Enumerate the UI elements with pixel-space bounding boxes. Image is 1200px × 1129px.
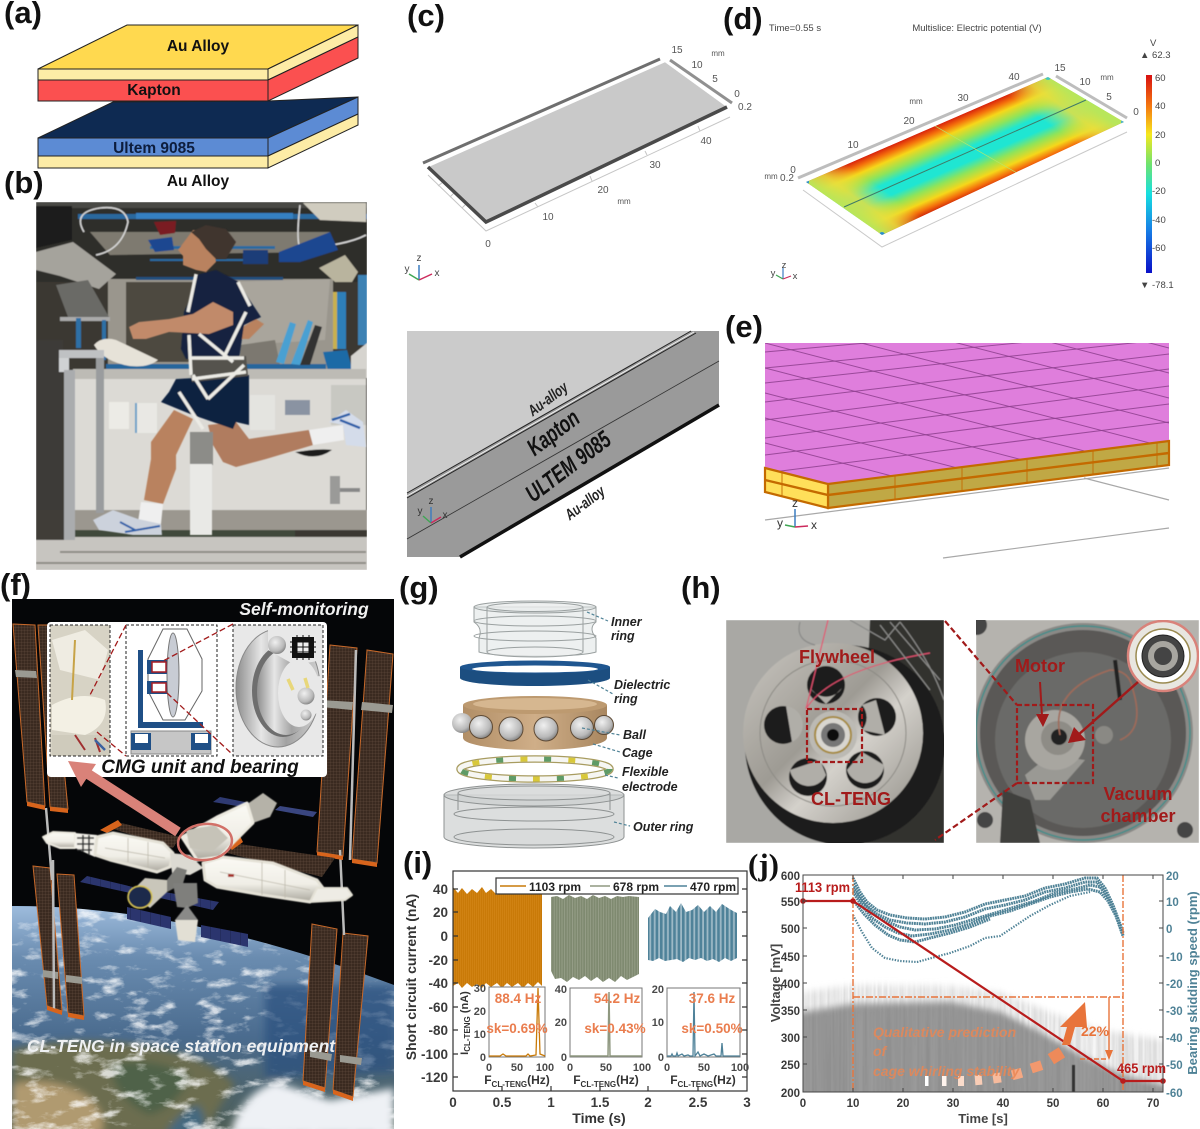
color bar labels: -60 <box>1152 243 1166 254</box>
bottom tick labels <box>800 1098 1159 1110</box>
potential field sheet <box>803 74 1127 238</box>
left tick labels: 550 <box>781 897 800 909</box>
inset y axis title: (nA) <box>459 991 471 1016</box>
label: Ultem 9085: Ultem 9085 <box>113 140 195 157</box>
light top face <box>407 331 691 493</box>
inset FFT 1103 rpm: CL-TENG <box>492 1080 527 1089</box>
inset FFT 678 rpm: sk=0.43% <box>584 1021 646 1036</box>
layer labels: Au-alloy <box>524 378 572 420</box>
panel label (e): (e) <box>725 309 763 344</box>
left tick labels: 600 <box>781 871 800 883</box>
motor arrow <box>1036 682 1049 727</box>
right tick labels: -60 <box>1166 1088 1183 1100</box>
time label: Time=0.55 s <box>769 23 821 34</box>
axis numbers: 15 <box>1054 63 1066 74</box>
color bar <box>1146 75 1152 273</box>
dielectric ring <box>460 660 610 686</box>
axis numbers: 0 <box>1133 107 1139 118</box>
plot title: Multislice: Electric potential (V) <box>912 23 1042 34</box>
flexible electrode <box>460 759 610 779</box>
inset FFT 678 rpm: 100 <box>633 1062 651 1074</box>
axis numbers: 30 <box>649 160 661 171</box>
panel: electric potential simulation <box>764 23 1174 291</box>
axis numbers: mm <box>711 49 725 58</box>
axis numbers: 10 <box>1079 77 1091 88</box>
axis numbers: 10 <box>542 212 554 223</box>
axis box <box>428 117 730 231</box>
left tick labels: 450 <box>781 952 800 964</box>
triad <box>771 260 798 282</box>
panel: COMSOL geometry view <box>404 45 752 280</box>
inset FFT 1103 rpm: 20 <box>474 1006 486 1018</box>
y tick labels: 40 <box>433 882 448 897</box>
panel: bearing exploded view <box>444 601 694 848</box>
inset FFT 1103 rpm: F <box>484 1073 492 1087</box>
inset FFT 678 rpm: 20 <box>555 1017 567 1029</box>
growing dashed trend arrow <box>925 1002 1087 1086</box>
inset FFT 1103 rpm: 0 <box>486 1062 492 1074</box>
bottom tick labels: 20 <box>897 1098 909 1110</box>
inset FFT 470 rpm: 0 <box>658 1052 664 1064</box>
solar array bands and masts <box>15 650 393 1101</box>
bottom tick labels: 0 <box>800 1098 806 1110</box>
color bar labels: 40 <box>1155 101 1166 112</box>
color bar labels: 20 <box>1155 130 1166 141</box>
red speed line <box>800 898 1166 1084</box>
bottom tick labels: 10 <box>847 1098 859 1110</box>
inset FFT 678 rpm: 40 <box>555 984 567 996</box>
part labels: electrode <box>622 780 678 794</box>
part labels: Outer ring <box>633 820 694 834</box>
panel label (b): (b) <box>4 165 44 200</box>
start speed label: 1113 rpm <box>795 879 850 895</box>
inset FFT 1103 rpm: (Hz) <box>527 1073 550 1087</box>
panel: astronaut treadmill photo <box>36 202 367 570</box>
bottom tick labels: 70 <box>1147 1098 1159 1110</box>
triad: z <box>428 496 434 507</box>
gray sheet <box>428 62 727 222</box>
inset FFT 470 rpm: (Hz) <box>713 1073 736 1087</box>
x tick labels: 1.5 <box>591 1095 610 1110</box>
left tick labels: 250 <box>781 1060 800 1072</box>
color bar labels <box>1140 38 1174 291</box>
panel label (d): (d) <box>723 1 763 36</box>
current bands <box>453 887 737 988</box>
Flywheel label: Flywheel <box>799 647 875 667</box>
part labels: ring <box>611 629 635 643</box>
earth <box>12 900 394 1129</box>
y tick labels <box>421 882 448 1085</box>
triad: x <box>793 271 798 282</box>
left tick labels <box>781 871 800 1100</box>
annotation text <box>873 1024 1020 1079</box>
arrow to inset <box>68 761 178 832</box>
triad <box>777 496 817 532</box>
axis numbers <box>485 45 752 250</box>
inset FFT 470 rpm: 100 <box>731 1062 749 1074</box>
inset FFT 470 rpm: F <box>670 1073 678 1087</box>
right tick labels: 10 <box>1166 897 1179 909</box>
x tick labels: 0.5 <box>493 1095 512 1110</box>
CMG diagram <box>131 629 211 754</box>
axis numbers: 15 <box>671 45 683 56</box>
CMG photo <box>50 625 110 756</box>
triad: x <box>434 268 440 279</box>
panel label (i): (i) <box>403 845 432 880</box>
part labels: Cage <box>622 746 653 760</box>
axis numbers: 0.2 <box>738 102 752 113</box>
right tick labels: -20 <box>1166 979 1183 991</box>
y tick labels: -40 <box>428 976 448 991</box>
y tick labels: -80 <box>428 1023 448 1038</box>
inset FFT 470 rpm: 10 <box>652 1017 664 1029</box>
x tick labels: 2 <box>644 1095 652 1110</box>
left tick labels: 200 <box>781 1088 800 1100</box>
inset FFT 470 rpm: 20 <box>652 984 664 996</box>
color bar labels: -20 <box>1152 186 1166 197</box>
legend: 1103 rpm <box>529 880 581 894</box>
y tick labels: -20 <box>428 953 448 968</box>
axis numbers: mm <box>1100 73 1114 82</box>
inner ring <box>474 601 596 657</box>
color bar labels: 60 <box>1155 73 1166 84</box>
y tick labels: -60 <box>428 1000 448 1015</box>
axis numbers: mm <box>617 197 631 206</box>
bottom tick labels: 50 <box>1047 1098 1059 1110</box>
mesh lines <box>765 343 1169 476</box>
station modules <box>43 793 352 942</box>
red circle highlight <box>176 821 234 863</box>
triad <box>404 253 440 280</box>
panel: vacuum chamber photo <box>967 615 1199 843</box>
x axis title: Time (s) <box>572 1110 626 1126</box>
triad: y <box>771 268 776 279</box>
left tick labels: 500 <box>781 924 800 936</box>
lower plate: Ultem 9085 and Au alloy <box>38 97 358 168</box>
22 percent drop arrow: 22% <box>1081 1023 1110 1039</box>
gold front face <box>765 441 1169 508</box>
x tick labels: 2.5 <box>689 1095 708 1110</box>
part labels: Flexible <box>622 765 669 779</box>
inset FFT 678 rpm: 54.2 Hz <box>594 991 641 1006</box>
bearing cut-away <box>233 625 323 756</box>
x tick labels: 1 <box>547 1095 555 1110</box>
skidding speed scatter <box>853 878 1123 962</box>
inset FFT 678 rpm: F <box>573 1073 581 1087</box>
legend: 470 rpm <box>690 880 736 894</box>
triad: x <box>811 518 817 532</box>
y axis title: Short circuit current (nA) <box>403 894 419 1060</box>
color bar labels: ▼ -78.1 <box>1140 280 1174 291</box>
axis numbers: 0 <box>790 165 796 176</box>
station caption: CL-TENG in space station equipment <box>27 1036 336 1056</box>
bearing inset circle <box>1128 621 1198 691</box>
axis numbers: mm <box>764 172 778 181</box>
color bar labels: 0 <box>1155 158 1160 169</box>
axis numbers <box>764 63 1139 184</box>
y tick labels: -120 <box>421 1070 448 1085</box>
dashed box on chamber <box>1017 705 1093 783</box>
part labels: Inner <box>611 615 643 629</box>
panel: zoomed layer cross-section <box>407 331 719 557</box>
chart: short circuit current <box>403 871 751 1126</box>
panel: meshed geometry <box>764 343 1170 559</box>
color bar labels: V <box>1150 38 1157 49</box>
Au-alloy lower label: Au-alloy <box>561 482 609 524</box>
axis numbers: 40 <box>1008 72 1020 83</box>
dashed box on flywheel <box>807 709 862 762</box>
x tick labels: 0 <box>449 1095 457 1110</box>
axis numbers: 0.2 <box>780 173 794 184</box>
inset FFT 678 rpm: 50 <box>600 1062 612 1074</box>
bottom tick labels: 60 <box>1097 1098 1109 1110</box>
right tick labels: -40 <box>1166 1033 1183 1045</box>
inset FFT 1103 rpm: 30 <box>474 983 486 995</box>
right axis title: Bearing skidding speed (rpm) <box>1185 891 1200 1075</box>
y tick labels: 20 <box>433 905 448 920</box>
orange guide lines <box>853 875 1123 1092</box>
axis lines <box>765 468 1169 558</box>
panel: layered structure <box>38 25 358 168</box>
inset FFT 470 rpm: sk=0.50% <box>681 1021 743 1036</box>
inset panel <box>47 622 327 778</box>
red leaders <box>90 624 233 756</box>
annotation text: of <box>873 1043 888 1059</box>
white area below black edge <box>460 405 719 557</box>
solar arrays <box>13 624 393 1097</box>
axis numbers: 30 <box>957 93 969 104</box>
y tick labels: 0 <box>440 929 448 944</box>
inset FFT 1103 rpm: 50 <box>511 1062 523 1074</box>
legend: 678 rpm <box>613 880 659 894</box>
pink mesh top <box>765 343 1169 484</box>
station wings <box>80 797 335 947</box>
panel label (f): (f) <box>0 567 31 602</box>
label: Au Alloy bottom: Au Alloy <box>167 173 230 190</box>
astronaut running figure <box>93 225 366 535</box>
grey voltage signal <box>804 983 1162 1092</box>
label: Au Alloy top: Au Alloy <box>167 38 230 55</box>
end speed label: 465 rpm <box>1117 1060 1166 1076</box>
left axis title: Voltage [mV] <box>768 944 783 1022</box>
Kapton label: Kapton <box>522 405 585 461</box>
Vacuum label: Vacuum <box>1103 784 1173 804</box>
panel label (g): (g) <box>399 570 439 605</box>
right tick labels: -30 <box>1166 1006 1183 1018</box>
color bar labels: ▲ 62.3 <box>1140 50 1171 61</box>
sheet edges <box>423 59 732 222</box>
bottom tick labels: 40 <box>997 1098 1009 1110</box>
x tick labels: 3 <box>743 1095 751 1110</box>
triad: z <box>792 496 798 510</box>
inset FFT 678 rpm: (Hz) <box>616 1073 639 1087</box>
bottom tick labels: 30 <box>947 1098 959 1110</box>
axis frame <box>798 74 1127 247</box>
color bar labels: -40 <box>1152 215 1166 226</box>
legend <box>496 878 738 894</box>
triad: z <box>416 253 422 264</box>
axis numbers: 40 <box>700 136 712 147</box>
triad: x <box>442 510 448 521</box>
leader lines <box>582 612 630 826</box>
left tick labels: 300 <box>781 1033 800 1045</box>
axis numbers: 0 <box>734 89 740 100</box>
inset y axis title: CL-TENG <box>463 1016 472 1052</box>
axis numbers: 5 <box>1106 92 1112 103</box>
panel label (h): (h) <box>681 570 721 605</box>
zoom leaders <box>935 621 1017 840</box>
Motor label: Motor <box>1015 656 1065 676</box>
right tick labels <box>1166 871 1183 1100</box>
inset FFT 678 rpm: CL-TENG <box>581 1080 616 1089</box>
inset FFT 470 rpm: 37.6 Hz <box>689 991 736 1006</box>
triad: y <box>418 506 422 517</box>
annotation text: Qualitative prediction <box>873 1024 1016 1040</box>
frame <box>803 875 1163 1092</box>
CL-TENG label: CL-TENG <box>811 789 891 809</box>
part labels <box>611 615 694 834</box>
chart: voltage and skidding speed <box>768 871 1200 1126</box>
axis numbers: 0 <box>485 239 491 250</box>
inset FFT 678 rpm: 0 <box>567 1062 573 1074</box>
left tick labels: 350 <box>781 1006 800 1018</box>
inset FFT 678 rpm <box>555 984 651 1089</box>
bottom axis title: Time [s] <box>958 1111 1008 1126</box>
triad: y <box>404 264 410 275</box>
inset FFT 678 rpm: 0 <box>561 1052 567 1064</box>
right tick labels: -50 <box>1166 1060 1183 1072</box>
axis numbers: 20 <box>597 185 609 196</box>
inset FFT 470 rpm: 50 <box>698 1062 710 1074</box>
inset FFT 1103 rpm <box>474 983 554 1089</box>
ULTEM label: ULTEM 9085 <box>521 426 617 508</box>
right tick labels: -10 <box>1166 952 1183 964</box>
y tick labels: -100 <box>421 1047 448 1062</box>
panel: flywheel photo <box>726 620 945 845</box>
right tick labels: 20 <box>1166 871 1179 883</box>
inset FFT 470 rpm: CL-TENG <box>678 1080 713 1089</box>
inset y axis title: I <box>459 1052 471 1055</box>
inset FFT 1103 rpm: 88.4 Hz <box>495 991 542 1006</box>
part labels: Dielectric <box>614 678 670 692</box>
bearing arrow <box>1068 682 1138 743</box>
panel: space station illustration <box>12 599 394 1129</box>
axis numbers: mm <box>909 97 923 106</box>
inset FFT 470 rpm <box>652 984 749 1089</box>
axis numbers: 5 <box>712 74 718 85</box>
inset FFT 470 rpm: 0 <box>664 1062 670 1074</box>
triad: y <box>777 516 783 530</box>
axis numbers: 20 <box>903 116 915 127</box>
dashed boxes <box>50 625 323 756</box>
axis numbers: 10 <box>847 140 859 151</box>
chamber label: chamber <box>1100 806 1176 826</box>
cage with balls <box>452 696 614 750</box>
panel label (j): (j) <box>748 847 779 882</box>
part labels: ring <box>614 692 638 706</box>
inset FFT 1103 rpm: 0 <box>480 1052 486 1064</box>
triad <box>418 496 448 523</box>
x tick labels <box>449 1095 751 1110</box>
22 percent drop arrow <box>1081 997 1113 1060</box>
right tick labels: 0 <box>1166 924 1172 936</box>
inset FFT 1103 rpm: 10 <box>474 1029 486 1041</box>
plot frame <box>453 871 747 1091</box>
inset FFT 1103 rpm: 100 <box>536 1062 554 1074</box>
Self-monitoring title: Self-monitoring <box>239 599 369 619</box>
triad: z <box>782 260 787 271</box>
annotation text: cage whirling stability <box>873 1063 1020 1079</box>
inset title: CMG unit and bearing <box>101 757 299 778</box>
outer ring <box>444 784 624 848</box>
part labels: Ball <box>623 728 646 742</box>
axis numbers: 10 <box>691 60 703 71</box>
label: Kapton: Kapton <box>127 82 181 99</box>
inset FFT 1103 rpm: sk=0.69% <box>486 1021 548 1036</box>
upper plate: Au alloy and Kapton <box>38 25 358 101</box>
left tick labels: 400 <box>781 979 800 991</box>
